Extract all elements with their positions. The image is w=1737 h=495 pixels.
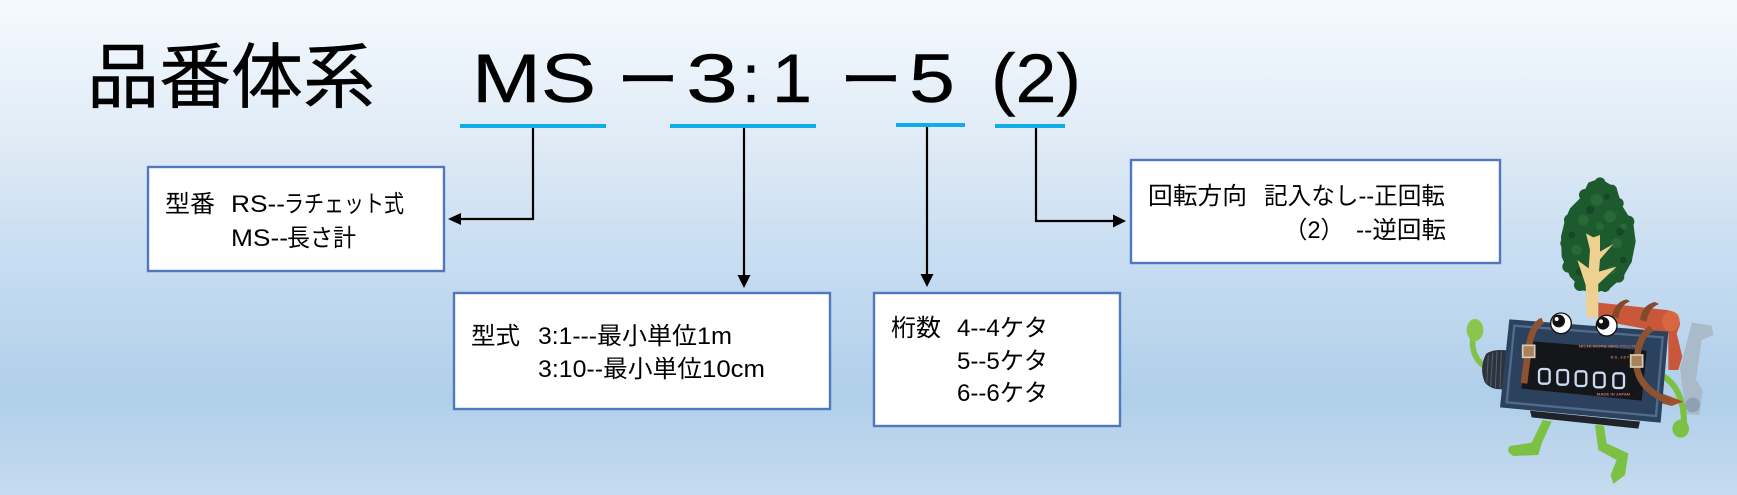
panel: rotation direction — [1131, 160, 1500, 263]
part number formula: 3 — [686, 40, 738, 117]
values: 長さ計 — [287, 225, 356, 252]
values: 10cm — [702, 356, 765, 383]
values: 1m — [697, 323, 732, 350]
icon: left fist — [1467, 319, 1483, 341]
arrow: digits to box — [920, 127, 934, 287]
underline: digits — [896, 123, 965, 127]
label: 回転方向 — [1148, 183, 1247, 210]
values: 記入なし--正回転 — [1264, 183, 1445, 210]
icon: legs — [1508, 420, 1628, 484]
values: RS-- — [231, 191, 285, 218]
display labels: NICHI-MORE MFG CO.LTD — [1579, 344, 1637, 349]
icon: strap under body — [1653, 390, 1683, 406]
values: 6--6ケタ — [957, 380, 1048, 407]
icon: counter body — [1500, 319, 1668, 423]
values — [538, 323, 765, 383]
part number formula: (2) — [991, 40, 1081, 117]
part number formula: ー — [840, 47, 902, 116]
display labels: RS.387 — [1611, 354, 1630, 359]
part number formula: ー — [617, 47, 679, 116]
values: （2） — [1284, 217, 1344, 244]
values: 最小単位 — [597, 323, 697, 350]
icon: right arm — [1664, 377, 1684, 423]
underline: rotation — [995, 124, 1065, 128]
display labels: MADE IN JAPAN — [1597, 391, 1630, 396]
label: 型式 — [471, 323, 520, 350]
values: 5--5ケタ — [957, 348, 1048, 375]
icon: digits 00000 — [1539, 369, 1624, 388]
icon: right hand — [1672, 420, 1689, 438]
icon: knob — [1482, 350, 1508, 389]
icon: eyes — [1551, 313, 1617, 336]
values: 4--4ケタ — [957, 315, 1048, 342]
icon: backpack roll — [1598, 299, 1682, 370]
display labels — [1579, 344, 1637, 396]
icon: crank wrench — [1680, 323, 1713, 415]
icon: bezel highlight — [1507, 326, 1663, 416]
icon: tree foliage — [1560, 177, 1636, 292]
underline: type — [670, 124, 816, 128]
arrow: model to box — [448, 128, 533, 225]
values: 3:1--- — [538, 323, 597, 350]
panel: digits — [874, 293, 1120, 426]
icon: display — [1521, 341, 1647, 401]
arrow: rotation to box — [1036, 128, 1126, 228]
panel: type — [454, 293, 830, 409]
icon: left arm — [1473, 340, 1484, 366]
values: 最小単位 — [603, 356, 702, 383]
label: 型番 — [165, 191, 215, 218]
icon: buckles — [1523, 345, 1643, 367]
icon: counter base — [1530, 411, 1640, 429]
icon: tree trunk — [1577, 233, 1617, 317]
values: MS-- — [231, 225, 288, 252]
panel: model number — [148, 167, 444, 271]
part number formula: MS — [472, 40, 596, 117]
values — [1264, 183, 1446, 244]
values — [231, 191, 404, 252]
mascot: tally counter character — [1467, 177, 1713, 484]
icon: straps — [1524, 321, 1670, 402]
part number formula — [472, 40, 1081, 117]
arrow: type to box — [738, 128, 750, 288]
underline: model — [460, 124, 606, 128]
title: 品番体系 — [87, 39, 375, 118]
values — [957, 315, 1048, 407]
part number formula: 5 — [909, 40, 955, 117]
values: ラチェット式 — [284, 191, 404, 218]
part number formula: 1 — [772, 40, 812, 117]
label: 桁数 — [891, 315, 941, 342]
values: 3:10-- — [538, 356, 603, 383]
values: --逆回転 — [1356, 217, 1446, 244]
part number formula: : — [742, 40, 760, 117]
